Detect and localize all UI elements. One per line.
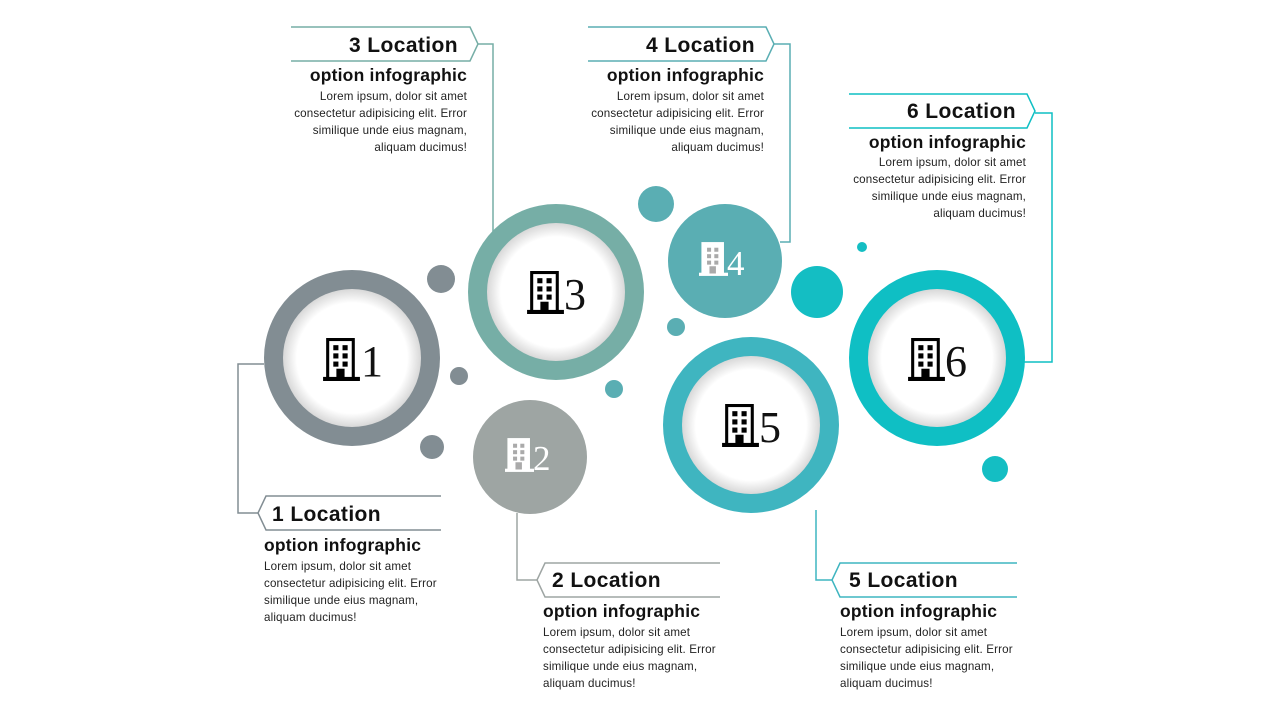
label 1: aliquam ducimus!: [264, 611, 357, 624]
circle 6: 6: [945, 337, 967, 386]
label 5: Lorem ipsum, dolor sit amet: [840, 626, 988, 639]
label 4: aliquam ducimus!: [671, 141, 764, 154]
label 5: consectetur adipisicing elit. Error: [840, 643, 1013, 656]
label 1: Lorem ipsum, dolor sit amet: [264, 560, 412, 573]
circle 4: 4: [727, 244, 744, 283]
label 2: 2 Location: [552, 569, 661, 592]
label 5: similique unde eius magnam,: [840, 660, 994, 673]
circle 6: [849, 270, 1025, 446]
label 3: aliquam ducimus!: [374, 141, 467, 154]
decorative dots: [420, 186, 1008, 482]
label 3: [291, 27, 478, 154]
circle 5: 5: [759, 403, 781, 452]
label 1: 1 Location: [272, 503, 381, 526]
label 5: aliquam ducimus!: [840, 677, 933, 690]
label 6: [849, 94, 1035, 220]
label 6: similique unde eius magnam,: [872, 190, 1026, 203]
circle 3: [468, 204, 644, 380]
circle 2: [473, 400, 587, 514]
label 2: similique unde eius magnam,: [543, 660, 697, 673]
label 2: option infographic: [543, 601, 700, 621]
circle 1: [264, 270, 440, 446]
label 3: 3 Location: [349, 34, 458, 57]
label 2: Lorem ipsum, dolor sit amet: [543, 626, 691, 639]
label 4: Lorem ipsum, dolor sit amet: [617, 90, 765, 103]
label 6: consectetur adipisicing elit. Error: [853, 173, 1026, 186]
label 5: [832, 563, 1017, 690]
label 1: option infographic: [264, 535, 421, 555]
label 1: similique unde eius magnam,: [264, 594, 418, 607]
label 3: option infographic: [310, 65, 467, 85]
label 4: 4 Location: [646, 34, 755, 57]
circle 4: [668, 204, 782, 318]
label 6: Lorem ipsum, dolor sit amet: [879, 156, 1027, 169]
circle 1: 1: [361, 337, 383, 386]
label 6: 6 Location: [907, 100, 1016, 123]
label 5: 5 Location: [849, 569, 958, 592]
label 3: similique unde eius magnam,: [313, 124, 467, 137]
label 5: option infographic: [840, 601, 997, 621]
circle 2: 2: [533, 439, 550, 478]
label 4: [588, 27, 774, 154]
label 6: option infographic: [869, 132, 1026, 152]
label 2: [537, 563, 720, 690]
circle 5: [663, 337, 839, 513]
label 4: option infographic: [607, 65, 764, 85]
label 2: consectetur adipisicing elit. Error: [543, 643, 716, 656]
label 1: [258, 496, 441, 624]
connector lines: [238, 44, 1052, 580]
circle 3: 3: [564, 270, 586, 319]
label 6: aliquam ducimus!: [933, 207, 1026, 220]
label 1: consectetur adipisicing elit. Error: [264, 577, 437, 590]
label 4: similique unde eius magnam,: [610, 124, 764, 137]
label 3: consectetur adipisicing elit. Error: [294, 107, 467, 120]
label 3: Lorem ipsum, dolor sit amet: [320, 90, 468, 103]
label 2: aliquam ducimus!: [543, 677, 636, 690]
label 4: consectetur adipisicing elit. Error: [591, 107, 764, 120]
